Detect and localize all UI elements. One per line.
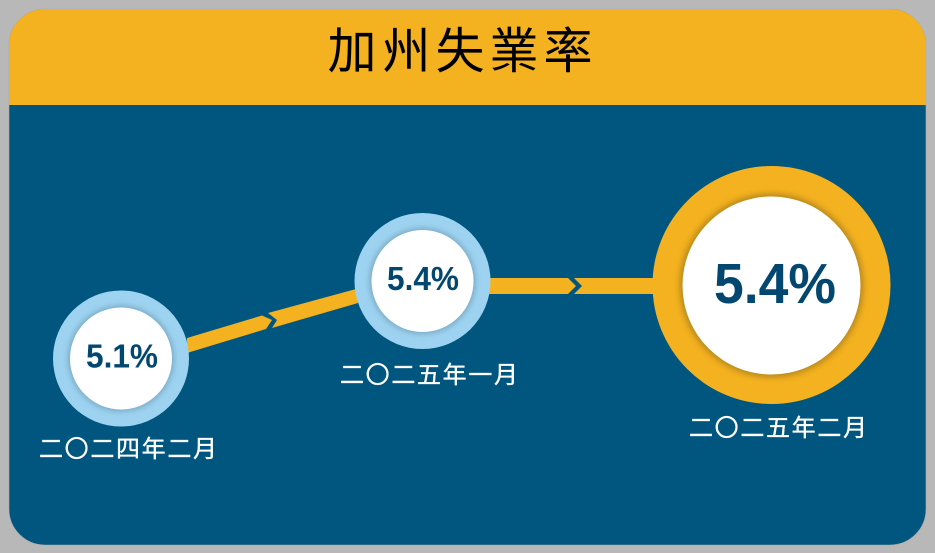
label: January 2025: 二〇二五年一月 bbox=[340, 362, 518, 389]
label: February 2025: 二〇二五年二月 bbox=[689, 415, 867, 442]
data point: January 2025 bbox=[354, 213, 490, 349]
header band bbox=[9, 9, 926, 105]
data point: February 2025 bbox=[652, 166, 890, 404]
data point: January 2025: 5.4% bbox=[387, 260, 459, 297]
arrow: Feb 2024 to Jan 2025 bbox=[187, 289, 358, 353]
arrow: Jan 2025 to Feb 2025 bbox=[488, 278, 656, 294]
data point: February 2024 bbox=[53, 290, 189, 426]
data point: February 2025: 5.4% bbox=[714, 252, 836, 316]
title: 加州失業率 bbox=[328, 25, 592, 79]
label: February 2024: 二〇二四年二月 bbox=[39, 436, 217, 463]
data point: February 2024: 5.1% bbox=[86, 338, 158, 374]
